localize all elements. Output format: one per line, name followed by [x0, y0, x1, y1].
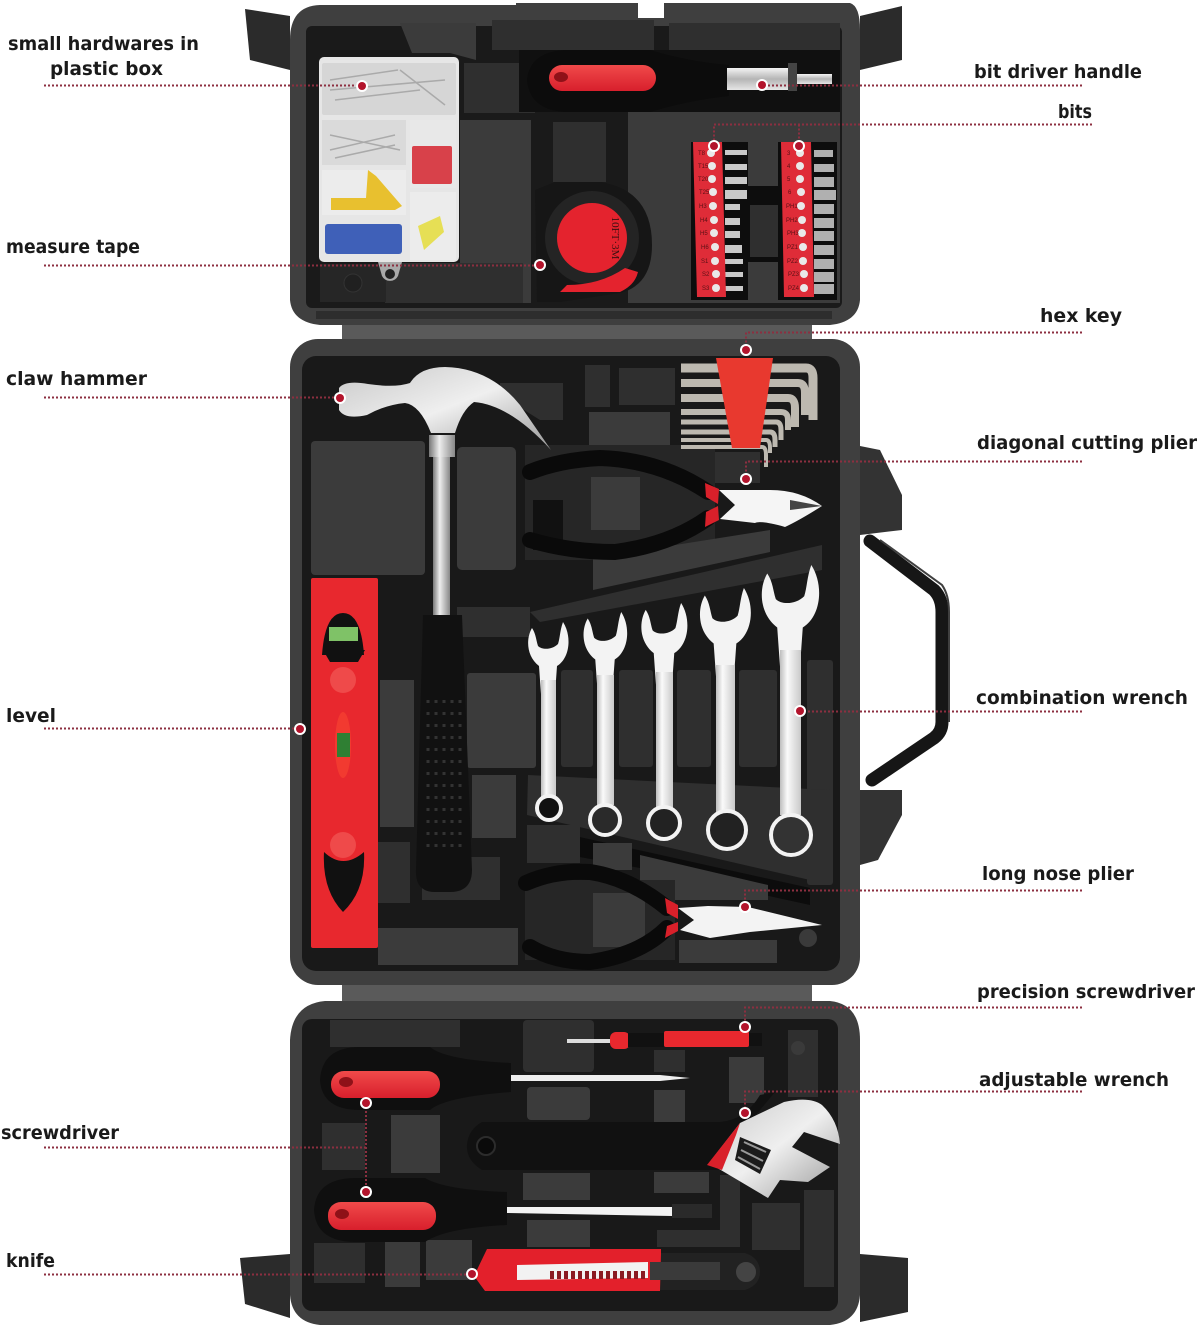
bit size labels: T15: [698, 164, 709, 170]
hardware contents: [325, 70, 452, 254]
label: hex key: hex key: [1040, 305, 1123, 327]
hinge bottom: [342, 985, 812, 1001]
tool: precision screwdriver: [567, 1031, 762, 1049]
bit size labels: S1: [701, 259, 709, 265]
bit size labels: PH3: [787, 231, 799, 237]
tool: knife: [474, 1249, 760, 1291]
case: handle: [860, 446, 949, 865]
case: bottom flaps: [240, 1254, 908, 1322]
bit size labels: S3: [702, 286, 710, 292]
bit size labels: H6: [701, 245, 709, 251]
callout dots: [294, 79, 806, 1280]
hex key holder: [716, 358, 773, 448]
label: screwdriver: screwdriver: [1, 1122, 120, 1144]
tape label: 10FT·3M: [609, 217, 621, 260]
label: small hardwares in plastic box: small hardwares in: [8, 33, 199, 55]
panel: middle case section: [290, 339, 860, 985]
tool: bit sets: [693, 142, 836, 297]
label: level: level: [6, 705, 56, 727]
label: measure tape: measure tape: [6, 236, 140, 258]
bit size labels: H3: [699, 204, 707, 210]
callout lines: [44, 86, 1092, 1274]
label: long nose plier: long nose plier: [982, 863, 1135, 885]
bit size labels: T8: [698, 151, 706, 157]
wrench 5: [762, 565, 819, 855]
bit size labels: 6: [788, 190, 792, 196]
tool: combination wrenches: [528, 565, 819, 855]
case: top flaps: [245, 6, 902, 70]
bit size labels: PZ1: [787, 245, 799, 251]
label: bits: bits: [1058, 101, 1092, 123]
label: small hardwares in plastic box: [8, 33, 199, 80]
tool: adjustable wrench: [467, 1092, 840, 1198]
tool: slotted screwdriver: [320, 1047, 690, 1110]
tool: claw hammer: [339, 367, 551, 892]
label: claw hammer: claw hammer: [6, 368, 148, 390]
tray blocks: [320, 20, 840, 303]
tool: long nose plier: [526, 872, 822, 962]
bit size labels: PZ4: [788, 286, 800, 292]
bit size labels: 3: [787, 151, 791, 157]
bit size labels: 4: [787, 164, 791, 170]
bit size labels: H5: [700, 231, 708, 237]
wrench 1: [528, 622, 569, 820]
bit circles: [707, 149, 808, 292]
tray blocks: [311, 365, 833, 965]
label: combination wrench: combination wrench: [976, 687, 1188, 709]
tool: plastic box of small hardware: [319, 57, 459, 281]
bit size labels: PZ3: [788, 272, 800, 278]
tool: hex key set: [681, 358, 813, 467]
tool: bit driver handle: [527, 50, 832, 112]
wrench 4: [700, 588, 751, 849]
hinge top: [342, 325, 812, 341]
bit size labels: PH1: [786, 204, 798, 210]
wrench 2: [584, 612, 627, 835]
tray blocks: [314, 1020, 834, 1287]
tool: measure tape: [535, 182, 652, 302]
tool: diagonal cutting plier: [530, 458, 822, 552]
bit size labels: T20: [698, 177, 709, 183]
left bit row: [693, 142, 747, 297]
bit size labels: 5: [787, 177, 791, 183]
bit size labels: T25: [699, 190, 710, 196]
bit size labels: H4: [700, 218, 708, 224]
bit size labels: PH2: [786, 218, 798, 224]
bit size labels: S2: [702, 272, 710, 278]
wrench 3: [641, 603, 687, 839]
label: adjustable wrench: adjustable wrench: [979, 1069, 1169, 1091]
panel: bottom case section: [290, 1001, 860, 1325]
label: knife: knife: [6, 1250, 55, 1272]
right bit row: [781, 142, 836, 297]
label: small hardwares in plastic box: plastic box: [50, 58, 163, 80]
tool: level: [311, 578, 378, 948]
label: bit driver handle: bit driver handle: [974, 61, 1142, 83]
bit size labels: [698, 151, 800, 292]
panel: top case section: [290, 3, 860, 325]
bit size labels: PZ2: [787, 259, 799, 265]
tool: phillips screwdriver: [314, 1178, 712, 1242]
